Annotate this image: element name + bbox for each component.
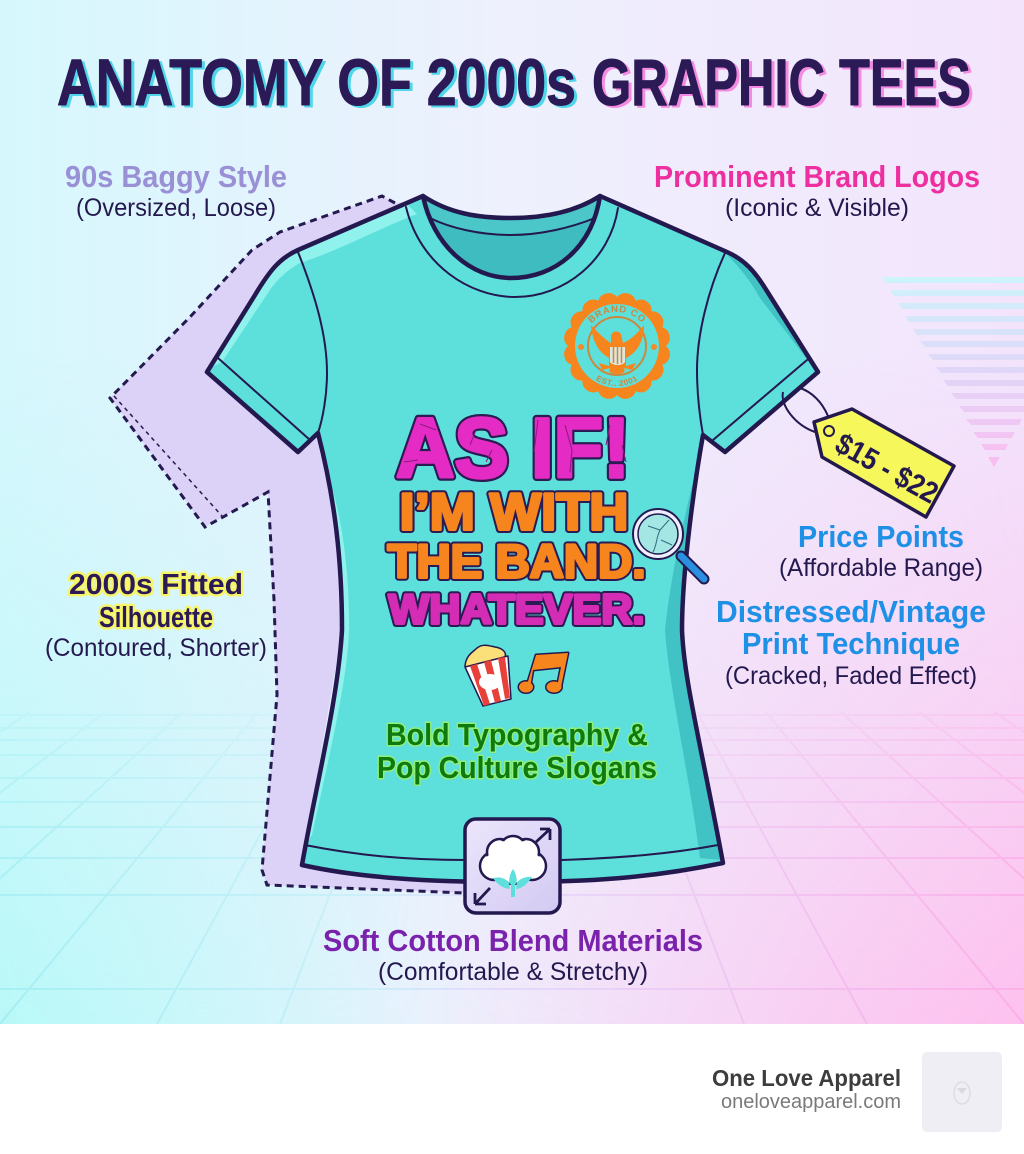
slogan: as if: AS IF! <box>396 401 630 495</box>
label: 2000s fitted silhouette: (Contoured, Shorter) <box>45 634 267 662</box>
icon: price tag <box>783 388 954 517</box>
icon: magnifying glass <box>633 509 704 579</box>
label: 2000s fitted silhouette: 2000s Fitted <box>69 569 243 601</box>
title: left cyan-shadowed: ANATOMY OF 2000s <box>57 45 576 119</box>
icon: brand logo badge: EST.. 2001 <box>596 375 638 386</box>
label: prominent brand logos <box>654 159 980 222</box>
label: 2000s fitted silhouette: Silhouette <box>99 602 213 634</box>
label: 90s baggy style <box>65 159 287 222</box>
slogan: with the band: I’M WITH <box>400 484 628 542</box>
label: 90s baggy style: (Oversized, Loose) <box>76 194 276 222</box>
highlights and shading <box>210 205 417 843</box>
neck interior <box>423 196 600 278</box>
title: left cyan-shadowed: ANATOMY OF 2000s <box>60 47 579 121</box>
slogan: as if: AS IF! <box>396 401 630 495</box>
label: bold typography: Bold Typography & <box>386 717 648 752</box>
t-shirt <box>207 196 818 882</box>
label: price points: Price Points <box>798 519 964 554</box>
label: distressed print: (Cracked, Faded Effect) <box>725 662 977 690</box>
label: soft cotton: (Comfortable & Stretchy) <box>378 958 648 986</box>
slogan: whatever: WHATEVER. <box>388 586 644 632</box>
footer logo <box>922 1052 1002 1132</box>
label: 2000s fitted silhouette <box>45 569 267 662</box>
decorative striped triangle <box>882 277 1024 467</box>
label: distressed print: Print Technique <box>742 626 960 661</box>
slogan: with the band: I’M WITH <box>400 484 628 542</box>
slogan: with the band: THE BAND. <box>388 534 646 588</box>
footer brand text <box>712 1065 901 1113</box>
perspective grid floor <box>0 712 1024 1024</box>
label: soft cotton <box>323 923 703 986</box>
label: prominent brand logos: (Iconic & Visible) <box>725 194 909 222</box>
label: bold typography <box>377 717 657 785</box>
icon: cotton box <box>465 819 560 913</box>
icon: brand logo badge <box>564 293 670 399</box>
label: distressed print: Distressed/Vintage <box>716 594 986 629</box>
eagle <box>591 325 644 374</box>
label: 90s baggy style: 90s Baggy Style <box>65 159 287 194</box>
title <box>57 45 974 121</box>
label: bold typography: Pop Culture Slogans <box>377 750 657 785</box>
label: prominent brand logos: Prominent Brand Logos <box>654 159 980 194</box>
label: price points: (Affordable Range) <box>779 554 983 582</box>
label: soft cotton: Soft Cotton Blend Materials <box>323 923 703 958</box>
footer band <box>0 1024 1024 1154</box>
icon: brand logo badge: BRAND CO <box>588 305 645 323</box>
icon: price tag: $15 - $22 <box>830 427 944 510</box>
label: price points <box>779 519 983 582</box>
shirt body <box>207 196 818 882</box>
slogan: with the band <box>388 484 646 588</box>
footer brand text: oneloveapparel.com <box>721 1090 901 1113</box>
shirt outline <box>207 196 818 882</box>
slogan: whatever: WHATEVER. <box>388 586 644 632</box>
icon: popcorn <box>465 645 511 706</box>
slogan print <box>388 401 646 632</box>
90s baggy silhouette: dashed oversized outline <box>110 196 465 893</box>
footer brand text: One Love Apparel <box>712 1065 901 1091</box>
label: distressed print <box>716 594 986 690</box>
slogan: with the band: THE BAND. <box>388 534 646 588</box>
icon: music note <box>519 653 568 692</box>
collar lines <box>423 196 600 278</box>
seams <box>218 252 807 860</box>
